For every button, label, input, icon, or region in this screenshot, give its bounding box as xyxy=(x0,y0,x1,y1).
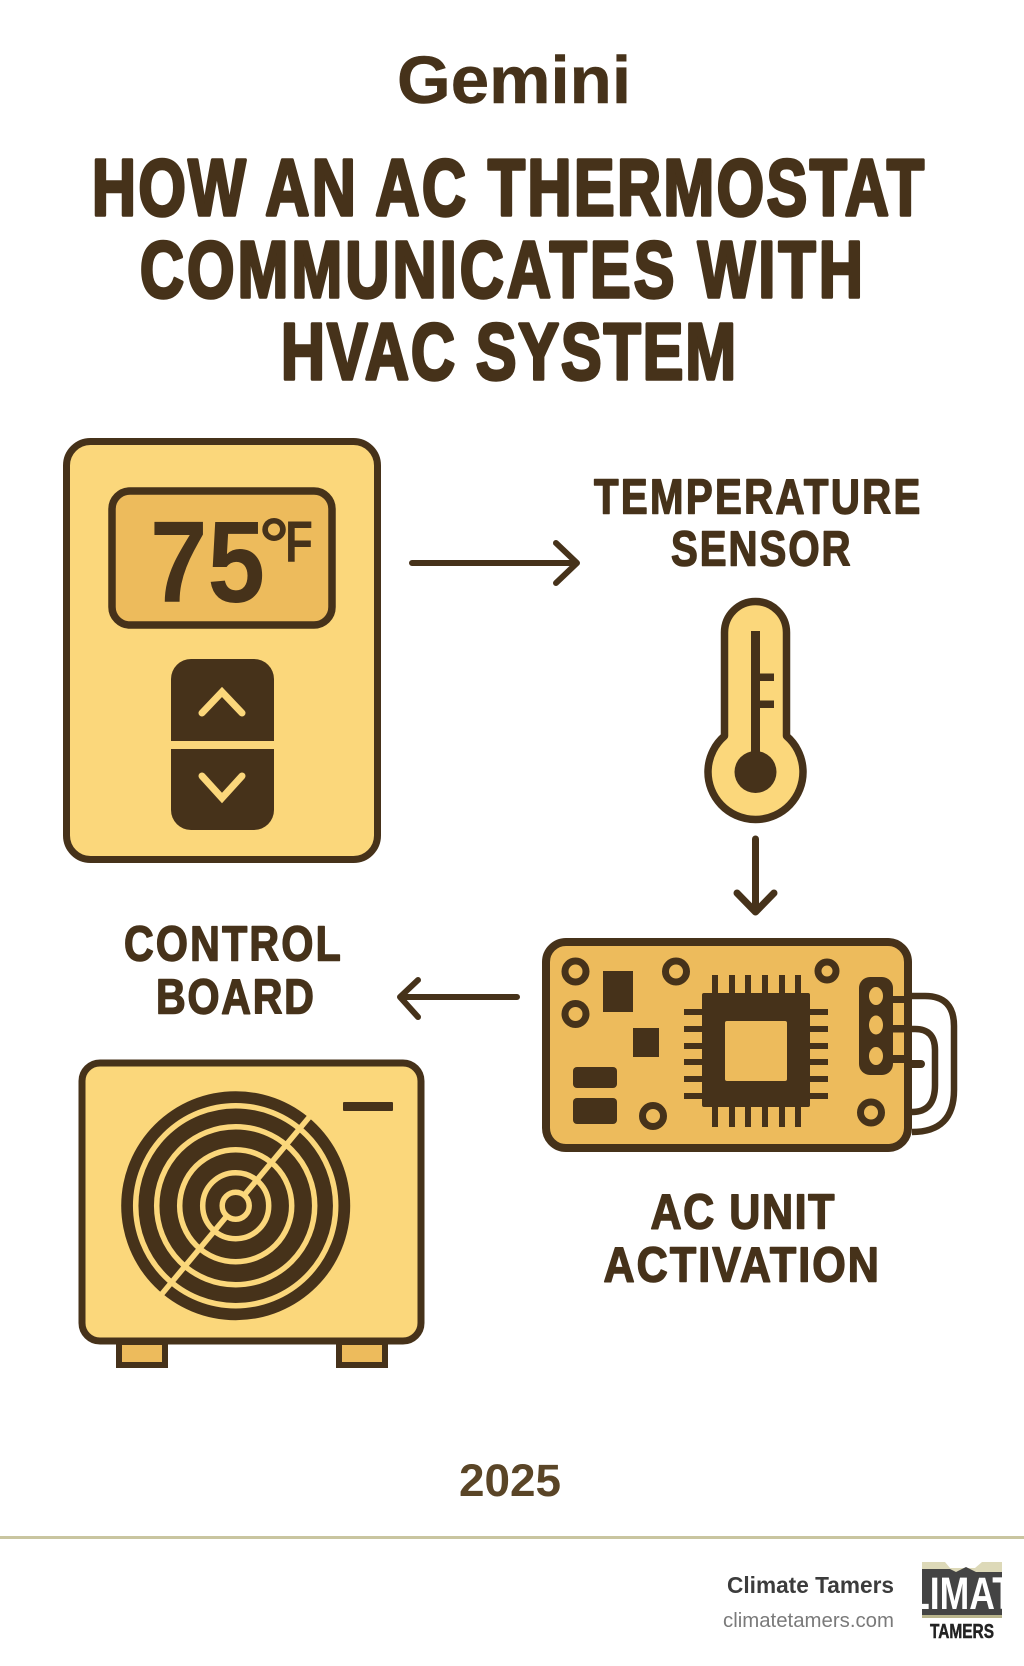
label: temperature sensor: TEMPERATURE xyxy=(594,470,920,524)
arrow: thermostat to temperature sensor xyxy=(412,543,577,583)
title: COMMUNICATES WITH xyxy=(140,226,863,315)
down button xyxy=(171,749,274,830)
title xyxy=(92,144,924,397)
label: temperature sensor: SENSOR xyxy=(671,522,851,576)
year: 2025 xyxy=(459,1455,561,1506)
icon: thermometer xyxy=(708,602,803,819)
mounting holes xyxy=(565,961,882,1126)
brand heading: Gemini: Gemini xyxy=(397,43,631,118)
label: control board: CONTROL xyxy=(124,916,341,971)
label: temperature sensor xyxy=(594,470,920,576)
connector block xyxy=(859,977,908,1075)
arrow: thermometer to circuit board xyxy=(737,839,774,912)
external wires xyxy=(905,996,954,1132)
processor chip xyxy=(684,975,828,1127)
footer brand text: climatetamers.com xyxy=(723,1609,894,1632)
fan grille xyxy=(121,1091,350,1320)
footer brand text xyxy=(723,1572,894,1632)
logo: Climate Tamers xyxy=(922,1562,1002,1638)
arrow: circuit board to control board label xyxy=(400,980,517,1017)
icon: outdoor AC unit xyxy=(82,1063,421,1365)
footer divider xyxy=(0,1536,1024,1539)
label: control board xyxy=(124,916,341,1024)
label: control board: BOARD xyxy=(156,969,314,1024)
up button xyxy=(171,659,274,741)
icon: thermostat xyxy=(66,442,378,860)
thermostat display xyxy=(112,491,332,627)
label: AC unit activation xyxy=(604,1184,879,1292)
thermostat display: ° xyxy=(259,502,289,586)
label: AC unit activation: ACTIVATION xyxy=(604,1237,879,1292)
thermostat display: 75 xyxy=(150,497,265,627)
components xyxy=(573,971,659,1124)
label: AC unit activation: AC UNIT xyxy=(650,1184,834,1239)
title: HOW AN AC THERMOSTAT xyxy=(92,144,924,233)
indicator slot xyxy=(343,1102,393,1111)
unit feet xyxy=(119,1342,385,1365)
footer brand text: Climate Tamers xyxy=(727,1572,894,1598)
title: HVAC SYSTEM xyxy=(281,308,736,397)
logo: Climate Tamers: TAMERS xyxy=(930,1621,994,1643)
icon: circuit board xyxy=(546,942,954,1148)
thermostat display: F xyxy=(285,510,313,575)
